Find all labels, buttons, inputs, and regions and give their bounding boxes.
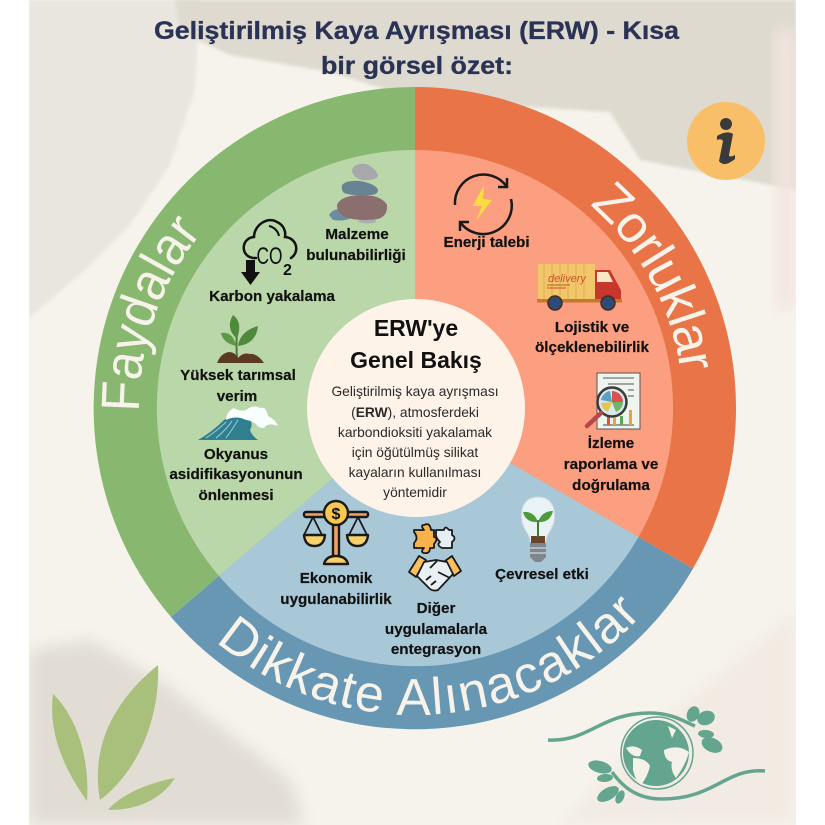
- item: Lojistik ve ölçeklenebilirlik: ölçeklenebilirlik: [535, 339, 650, 356]
- item: Diğer uygulamalarla entegrasyon: [385, 524, 488, 658]
- item: Lojistik ve ölçeklenebilirlik: Lojistik ve: [555, 319, 629, 336]
- item: İzleme raporlama ve doğrulama: doğrulama: [572, 477, 650, 494]
- item: İzleme raporlama ve doğrulama: raporlama ve: [564, 456, 658, 473]
- center heading: Genel Bakış: [350, 347, 482, 373]
- panel: Dikkate outer: [171, 408, 693, 729]
- center body: (ERW), atmosferdeki: [351, 405, 479, 420]
- icon: puzzle and handshake: [409, 524, 461, 591]
- item: Diğer uygulamalarla entegrasyon: entegrasyon: [391, 641, 481, 658]
- heading: Dikkate Alınacaklar: Dikkate Alınacaklar: [218, 596, 636, 715]
- panel: Zorluklar outer: [415, 87, 736, 568]
- icon: delivery truck: delivery: [548, 273, 587, 285]
- icon: info badge: [687, 102, 765, 180]
- icon: CO2 cloud: 2: [283, 262, 292, 279]
- heading: Zorluklar: Zorluklar: [591, 181, 708, 368]
- center heading: [350, 315, 482, 373]
- icon: light bulb with sprout: [521, 497, 555, 562]
- item: Çevresel etki: [495, 497, 589, 583]
- center body: [331, 384, 499, 500]
- item: Lojistik ve ölçeklenebilirlik: [535, 264, 650, 356]
- center body: için öğütülmüş silikat: [352, 445, 478, 460]
- item: Okyanus asidifikasyonunun önlenmesi: [169, 406, 303, 504]
- panel: Zorluklar inner: [415, 150, 673, 537]
- title: Geliştirilmiş Kaya Ayrışması (ERW) - Kısa: [154, 17, 680, 45]
- item: Okyanus asidifikasyonunun önlenmesi: Okyanus: [204, 446, 268, 463]
- decoration: earth with branches: [548, 704, 765, 805]
- icon: balance scale: $: [332, 506, 341, 523]
- item: Enerji talebi: Enerji talebi: [443, 234, 530, 251]
- center body: Geliştirilmiş kaya ayrışması: [331, 384, 499, 399]
- center body: kayaların kullanılması: [349, 465, 481, 480]
- title: bir görsel özet:: [321, 52, 513, 80]
- item: Ekonomik uygulanabilirlik: uygulanabilirlik: [280, 591, 392, 608]
- item: İzleme raporlama ve doğrulama: [564, 373, 658, 494]
- item: İzleme raporlama ve doğrulama: İzleme: [588, 435, 634, 452]
- heading: Faydalar: Faydalar: [102, 216, 196, 408]
- icon: CO2 cloud: [241, 220, 296, 285]
- item: Malzeme bulunabilirliği: Malzeme: [325, 226, 389, 243]
- icon: sprout: [217, 315, 264, 363]
- item: Yüksek tarımsal verim: [180, 315, 296, 405]
- item: Çevresel etki: Çevresel etki: [495, 566, 589, 583]
- title: [154, 17, 680, 80]
- item: Ekonomik uygulanabilirlik: [280, 501, 392, 608]
- item: Malzeme bulunabilirliği: bulunabilirliği: [306, 247, 406, 264]
- icon: wave: [198, 406, 278, 440]
- icon: CO2 cloud: CO: [256, 243, 282, 270]
- item: Karbon yakalama: Karbon yakalama: [209, 288, 335, 305]
- center body: yöntemidir: [383, 485, 447, 500]
- item: Diğer uygulamalarla entegrasyon: uygulamalarla: [385, 621, 488, 638]
- center body: karbondioksiti yakalamak: [338, 425, 492, 440]
- icon: energy cycle: [455, 175, 512, 234]
- item: Okyanus asidifikasyonunun önlenmesi: asidifikasyonunun: [169, 466, 303, 483]
- icon: rocks: [329, 164, 387, 224]
- decoration: green leaves: [52, 665, 175, 810]
- item: Malzeme bulunabilirliği: [306, 164, 406, 264]
- panel: Faydalar inner: [157, 150, 415, 576]
- panel: Faydalar outer: [94, 87, 415, 617]
- item: Yüksek tarımsal verim: verim: [217, 388, 257, 405]
- item: Diğer uygulamalarla entegrasyon: Diğer: [417, 600, 455, 617]
- icon: report with magnifier: [587, 373, 640, 429]
- item: Yüksek tarımsal verim: Yüksek tarımsal: [180, 367, 296, 384]
- item: Karbon yakalama: [209, 220, 335, 305]
- center circle: [307, 299, 525, 517]
- center heading: ERW'ye: [374, 315, 458, 341]
- item: Ekonomik uygulanabilirlik: Ekonomik: [300, 570, 373, 587]
- panel: Dikkate inner: [219, 408, 638, 666]
- item: Enerji talebi: [443, 175, 530, 251]
- item: Okyanus asidifikasyonunun önlenmesi: önlenmesi: [198, 487, 274, 504]
